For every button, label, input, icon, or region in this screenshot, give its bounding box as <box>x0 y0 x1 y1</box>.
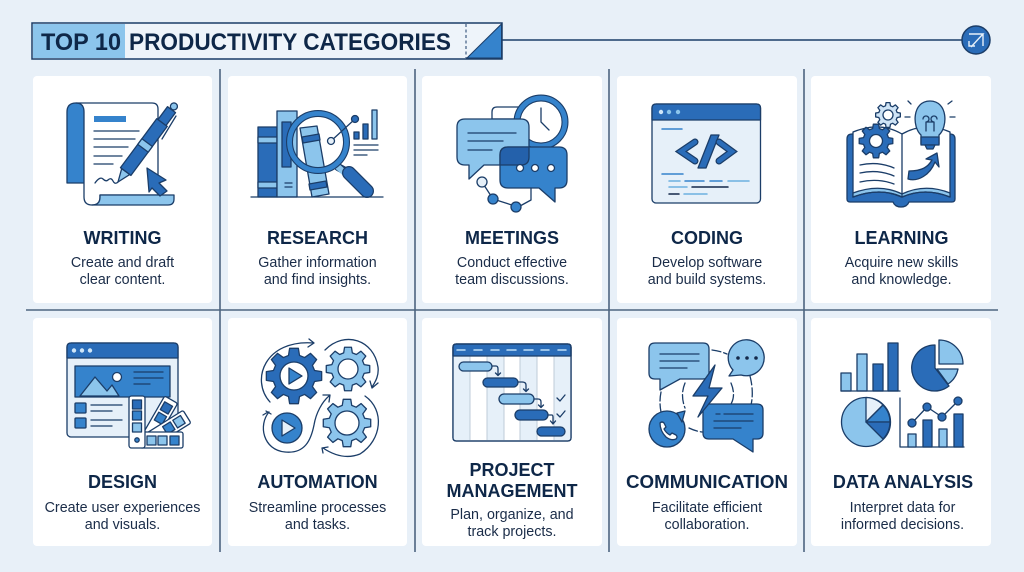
icon: chat bubbles and clock <box>457 98 567 212</box>
description: collaboration. <box>664 517 750 533</box>
description: Create user experiences <box>45 500 200 516</box>
description: informed decisions. <box>841 517 964 533</box>
panel: data analysis <box>811 318 991 546</box>
heading: AUTOMATION <box>257 472 378 492</box>
icon: charts <box>841 340 964 447</box>
icon: header badge <box>962 26 990 54</box>
description: and find insights. <box>264 272 371 288</box>
icon: gears and play cycle <box>261 339 378 456</box>
description: and visuals. <box>85 517 160 533</box>
description: Create and draft <box>71 255 174 271</box>
description: and build systems. <box>648 272 766 288</box>
heading: LEARNING <box>854 228 948 248</box>
panel: communication <box>617 318 797 546</box>
description: Acquire new skills <box>845 255 958 271</box>
icon: layout window with swatches <box>67 343 191 448</box>
icon: chat bubbles, phone and lightning <box>649 340 764 452</box>
heading: WRITING <box>84 228 162 248</box>
heading: RESEARCH <box>267 228 368 248</box>
heading: DATA ANALYSIS <box>833 472 973 492</box>
panel: automation <box>228 318 407 546</box>
description: Facilitate efficient <box>652 500 762 516</box>
description: team discussions. <box>455 272 569 288</box>
description: and tasks. <box>285 517 350 533</box>
panel: project management <box>422 318 602 546</box>
description: track projects. <box>468 524 556 540</box>
icon: open book with gears and bulb <box>847 101 955 207</box>
description: Conduct effective <box>457 255 567 271</box>
panel: writing <box>33 76 212 303</box>
description: clear content. <box>80 272 165 288</box>
title banner <box>32 23 502 59</box>
description: Plan, organize, and <box>450 507 574 523</box>
description: Interpret data for <box>850 500 956 516</box>
panel: research <box>228 76 407 303</box>
heading: MEETINGS <box>465 228 559 248</box>
heading: CODING <box>671 228 743 248</box>
title banner: PRODUCTIVITY CATEGORIES <box>129 29 451 56</box>
icon: gantt chart <box>453 344 571 441</box>
icon: code window <box>652 104 760 203</box>
description: and knowledge. <box>851 272 952 288</box>
icon: document and pen <box>67 100 181 205</box>
title banner: TOP 10 <box>41 29 121 56</box>
icon: books and magnifier <box>251 110 383 197</box>
heading: MANAGEMENT <box>446 481 578 501</box>
description: Streamline processes <box>249 500 386 516</box>
heading: PROJECT <box>469 460 555 480</box>
heading: DESIGN <box>88 472 157 492</box>
heading: COMMUNICATION <box>626 472 788 492</box>
panel: meetings <box>422 76 602 303</box>
panel: learning <box>811 76 991 303</box>
description: Gather information <box>258 255 377 271</box>
description: Develop software <box>652 255 762 271</box>
header connector line <box>502 39 963 41</box>
panel: coding <box>617 76 797 303</box>
panel: design <box>33 318 212 546</box>
